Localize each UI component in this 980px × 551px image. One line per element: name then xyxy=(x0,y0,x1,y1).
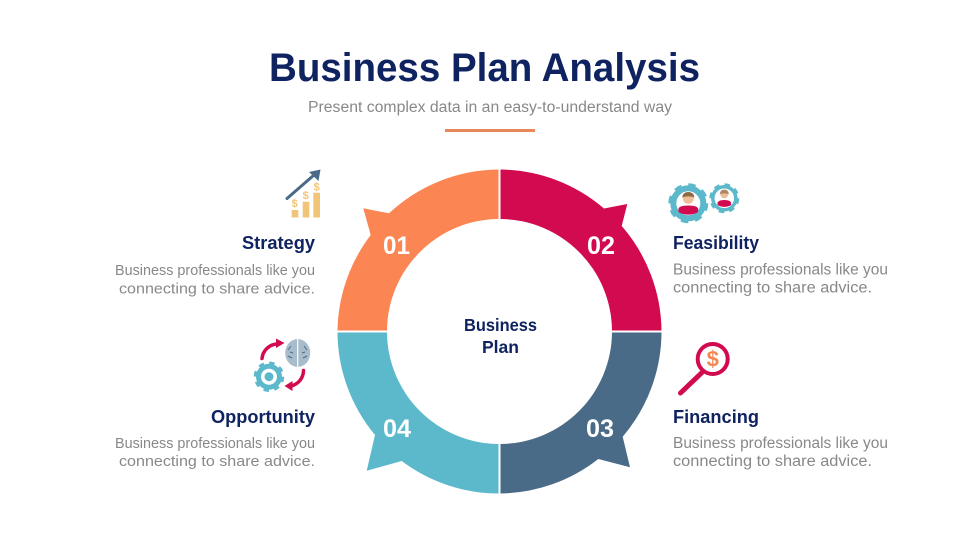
segment 03: slate blue: 03 xyxy=(586,415,614,443)
segment 03: slate blue xyxy=(500,332,662,494)
center label xyxy=(464,315,537,357)
icon: rising bars and arrow: $ xyxy=(314,182,320,194)
center label: Plan xyxy=(482,337,519,357)
segment 01: orange xyxy=(338,170,498,330)
body text: connecting to share advice. xyxy=(119,454,315,470)
center label: Business xyxy=(464,315,537,335)
icon: two gears with people xyxy=(670,185,738,222)
body text xyxy=(115,263,315,298)
icon: rising bars and arrow: $ xyxy=(292,198,298,210)
block: financing xyxy=(673,344,888,470)
segment 01: orange: 01 xyxy=(383,232,410,260)
segment 02: magenta: 02 xyxy=(587,232,615,260)
title underline xyxy=(445,129,535,132)
body text xyxy=(673,435,888,470)
body text: Business professionals like you xyxy=(115,436,315,452)
body text: Business professionals like you xyxy=(673,435,888,452)
block: opportunity xyxy=(115,338,315,470)
icon: magnifier with dollar: $ xyxy=(707,346,719,372)
block: strategy xyxy=(115,170,320,298)
title: Business Plan Analysis xyxy=(269,46,700,90)
body text: connecting to share advice. xyxy=(673,453,872,470)
body text xyxy=(673,262,888,297)
subtitle: Present complex data in an easy-to-understand way xyxy=(308,99,672,116)
heading: Feasibility xyxy=(673,233,759,253)
body text: Business professionals like you xyxy=(673,262,888,278)
body text: connecting to share advice. xyxy=(673,280,872,297)
icon: rising bars and arrow: $ xyxy=(303,190,309,202)
body text xyxy=(115,436,315,470)
icon: rising bars and arrow xyxy=(287,170,320,218)
icon: magnifier with dollar xyxy=(680,344,728,393)
block: feasibility xyxy=(670,185,888,297)
heading: Opportunity xyxy=(211,407,315,427)
ring diagram xyxy=(338,170,662,494)
icon: brain, gear and cycle arrows xyxy=(256,338,310,391)
body text: Business professionals like you xyxy=(115,263,315,279)
segment 04: teal: 04 xyxy=(383,415,411,443)
heading: Financing xyxy=(673,407,759,427)
heading: Strategy xyxy=(242,233,315,253)
body text: connecting to share advice. xyxy=(119,282,315,298)
segment 02: magenta xyxy=(500,170,662,330)
segment 04: teal xyxy=(338,332,498,494)
